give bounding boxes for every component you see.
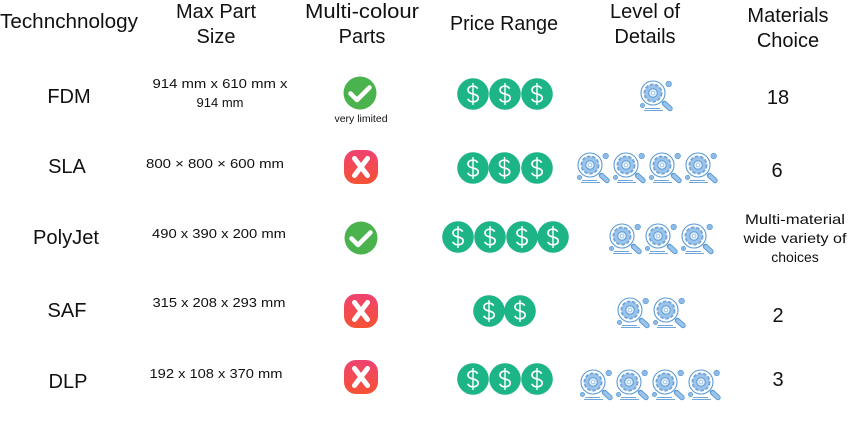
max part size: 914 mm x 610 mm x	[152, 76, 288, 91]
row: SAF	[48, 294, 784, 328]
materials count: 3	[772, 369, 784, 391]
technology name: SLA	[48, 156, 87, 178]
row: FDM	[47, 76, 789, 125]
heading: Level of Details: Level of	[610, 1, 680, 23]
heading: Price Range: Price Range	[450, 13, 558, 35]
icon: cross	[344, 294, 378, 328]
heading: Multi-colour Parts: Multi-colour	[305, 1, 419, 23]
heading: Materials Choice: Choice	[757, 30, 819, 52]
heading: Materials Choice: Materials	[747, 5, 829, 27]
materials count: 18	[767, 87, 789, 109]
materials count: 6	[771, 160, 783, 182]
row: SLA	[48, 150, 783, 184]
icon: cross	[344, 150, 378, 184]
icon: price coins	[457, 363, 553, 395]
icon: price coins	[457, 152, 553, 184]
technology name: FDM	[47, 86, 91, 108]
technology name: DLP	[49, 371, 87, 393]
materials note: Multi-material	[745, 211, 845, 227]
table headings	[0, 1, 829, 52]
max part size: 800 × 800 × 600 mm	[146, 156, 284, 171]
row: PolyJet	[33, 211, 847, 265]
max part size: 192 x 108 x 370 mm	[150, 366, 282, 381]
max part size: 315 x 208 x 293 mm	[152, 295, 286, 310]
icon: detail level	[609, 224, 712, 254]
max part size: 490 x 390 x 200 mm	[152, 226, 286, 241]
icon: check with note	[334, 76, 388, 125]
heading: Multi-colour Parts: Parts	[339, 26, 385, 48]
icon: detail level	[577, 153, 716, 182]
technology name: PolyJet	[33, 227, 99, 249]
technology name: SAF	[48, 300, 86, 322]
materials count: 2	[772, 305, 784, 327]
icon: price coins	[442, 221, 569, 253]
row: DLP	[49, 360, 784, 400]
icon: price coins	[457, 78, 553, 110]
icon: detail level	[580, 370, 720, 400]
icon: detail level	[640, 81, 672, 110]
heading: Technology: Technchnology	[0, 11, 138, 33]
materials note: choices	[771, 249, 819, 265]
materials note: wide variety of	[742, 230, 847, 246]
heading: Max Part Size: Size	[197, 26, 235, 48]
icon: check with note: very limited	[334, 113, 388, 125]
heading: Max Part Size: Max Part	[176, 1, 256, 23]
icon: check	[344, 222, 378, 254]
icon: cross	[344, 360, 378, 394]
icon: price coins	[473, 295, 536, 327]
heading: Level of Details: Details	[614, 26, 676, 48]
icon: detail level	[617, 298, 684, 328]
max part size: 914 mm	[197, 95, 243, 110]
